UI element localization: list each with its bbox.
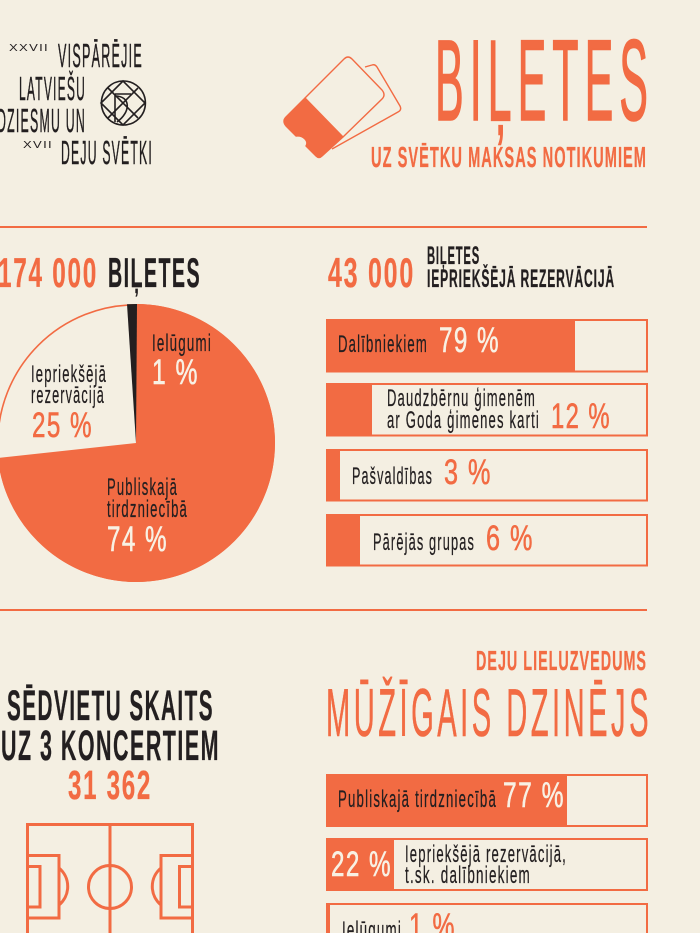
festival name text: DZIESMU UN (0, 102, 86, 139)
panel: seat count (1, 682, 220, 933)
heading: 174 000 tickets: 174 000 (0, 249, 98, 296)
label: pre-reservation 25%: rezervācijā (31, 382, 105, 409)
bar: large families 12%: ar Goda ģimenes karti (387, 407, 540, 434)
infographic page: SĒDVIETU SKAITS (7, 682, 214, 730)
bar: public sale 77%: Publiskajā tirdzniecībā (338, 786, 497, 813)
panel: total tickets pie: BIĻETES (108, 249, 201, 297)
bar: pre-reservation 22% (326, 838, 647, 891)
label: invitations 1%: 1 % (152, 353, 199, 392)
bar: other groups 6% (326, 514, 647, 566)
label: public sale 74%: 74 % (107, 520, 168, 559)
festival name text (0, 37, 153, 171)
heading: seats for 3 concerts (1, 682, 220, 808)
bar: municipalities 3%: 3 % (444, 453, 492, 492)
panel: dance performance (326, 645, 652, 933)
infographic page: VISPĀRĒJIE (58, 37, 143, 74)
label: pre-reservation 25%: 25 % (32, 406, 93, 445)
bar: other groups 6%: Pārējās grupas (373, 529, 475, 556)
bar: municipalities 3% (326, 449, 647, 501)
infographic page: UZ 3 KONCERTIEM (1, 722, 220, 770)
label: pre-reservation 25%: Iepriekšējā (31, 361, 107, 388)
infographic page: DEJU SVĒTKI (61, 134, 153, 171)
bar: other groups 6%: 6 % (486, 519, 534, 558)
festival logo block (0, 37, 153, 171)
heading: Mūžīgais dzinējs (326, 645, 652, 751)
festival name text: XVII (23, 140, 53, 151)
festival name text: XXVII (9, 43, 49, 54)
bar: pre-reservation 22%: Iepriekšējā rezervācijā, (405, 841, 567, 868)
bar: invitations 1% (326, 903, 647, 933)
festival name text: LATVIEŠU (19, 70, 86, 107)
icon: festival emblem (101, 81, 145, 125)
bar: large families 12%: Daudzbērnu ģimenēm (387, 385, 536, 412)
heading: 43 000 tickets (328, 242, 615, 296)
heading: seats for 3 concerts: 31 362 (68, 762, 152, 808)
pie chart (0, 304, 275, 582)
label: invitations 1% (152, 330, 212, 392)
bar: large families 12%: 12 % (551, 397, 611, 436)
label: pre-reservation 25% (31, 361, 107, 445)
panel: pre-reservation bars (326, 242, 647, 566)
icon: football field (28, 824, 192, 933)
panel: total tickets pie (0, 249, 275, 582)
label: public sale 74% (107, 474, 188, 559)
bar: participants 79%: Dalībniekiem (338, 331, 428, 358)
bar: pre-reservation 22%: 22 % (331, 845, 392, 884)
bar: public sale 77% (326, 774, 647, 827)
bar: municipalities 3%: Pašvaldības (352, 463, 433, 490)
heading: 43 000 tickets: BIĻETES (427, 242, 480, 270)
bar: pre-reservation 22%: t.sk. dalībniekiem (405, 862, 531, 889)
title (371, 17, 654, 174)
label: invitations 1%: Ielūgumi (152, 330, 212, 357)
bar: large families 12% (326, 383, 647, 436)
bar: participants 79%: 79 % (439, 321, 500, 360)
icon: tickets (284, 57, 401, 158)
bar: participants 79% (326, 319, 647, 372)
label: public sale 74%: tirdzniecībā (107, 496, 188, 523)
heading: 43 000 tickets: 43 000 (328, 249, 415, 296)
label: public sale 74%: Publiskajā (107, 474, 178, 501)
bar: public sale 77%: 77 % (503, 776, 565, 815)
